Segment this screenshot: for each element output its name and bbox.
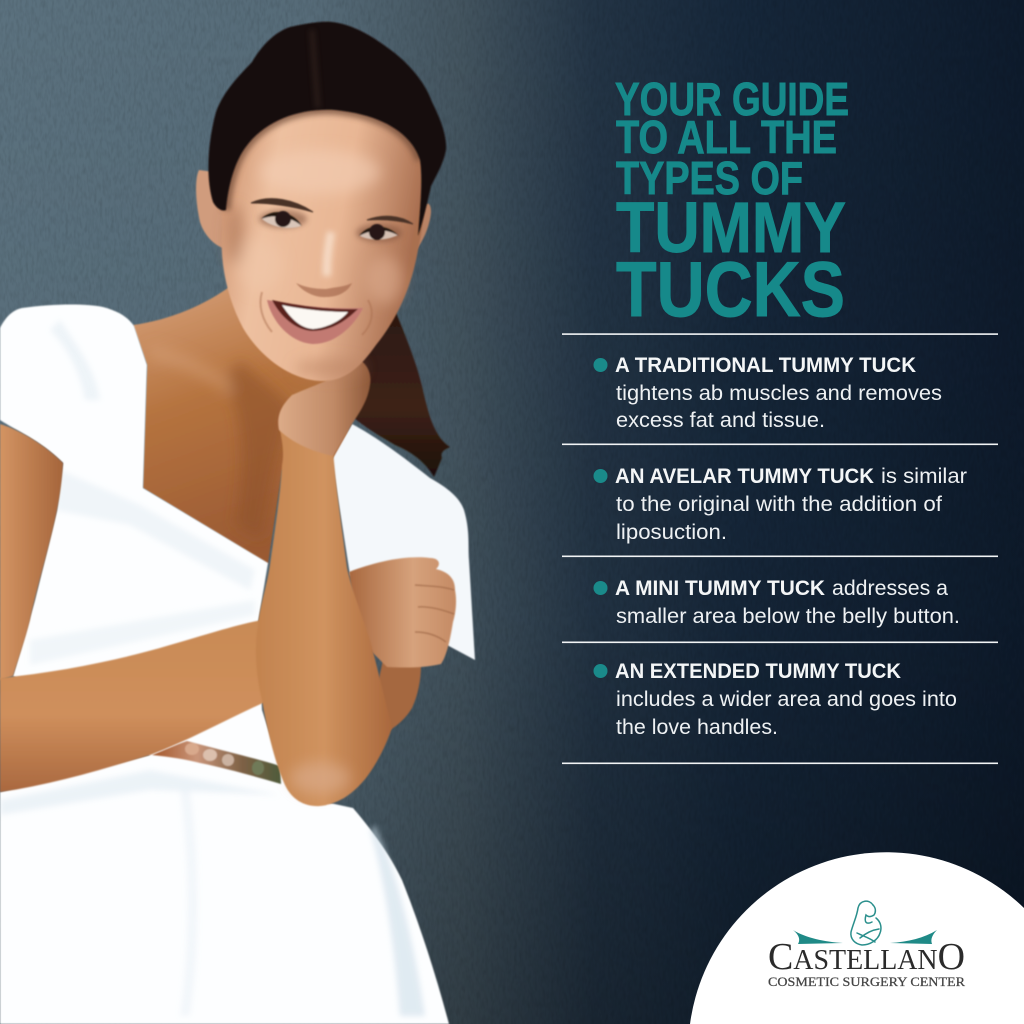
cheek smile lines [260,292,372,335]
mouth [267,300,363,344]
photo: smiling woman in white dress [0,22,475,1024]
title: YOUR GUIDE [615,73,849,125]
elbow highlight [290,762,350,794]
title: TO ALL THE [616,111,837,163]
nose [296,232,352,297]
bent arm with elbow [256,430,392,806]
list item: avelar tummy tuck: liposuction. [616,521,727,544]
list item: avelar tummy tuck: AN AVELAR TUMMY TUCK [615,465,874,488]
logo right wing [890,930,937,944]
list item: mini tummy tuck: smaller area below the belly button. [616,605,960,628]
logo left wing [793,930,843,944]
right eye [359,224,399,240]
left eyebrow [251,199,313,212]
list item: mini tummy tuck: A MINI TUMMY TUCK [615,577,825,600]
lower right forearm behind elbow [370,660,421,730]
dress fold shadows [0,320,425,1016]
left upper arm [0,424,63,680]
knuckle lines [415,585,454,642]
list item: traditional tummy tuck: excess fat and tissue. [616,409,825,432]
list item: mini tummy tuck [594,577,960,628]
neck and chest [133,285,362,564]
eye shadows [259,210,402,242]
title: TUMMY [616,189,846,268]
list item: traditional tummy tuck [594,354,942,432]
hair parting highlight [312,30,318,108]
white circle [690,852,1024,1024]
ponytail [354,305,450,477]
hairline soft brown transition [226,110,420,210]
face [222,102,426,381]
belt [152,741,281,784]
title: TUCKS [616,245,845,333]
logo subtitle: COSMETIC SURGERY CENTER [768,974,965,989]
list item: avelar tummy tuck [594,465,967,544]
icon: logo woman outline [851,901,881,945]
title [615,73,849,333]
right ear [410,204,431,250]
chest shading [150,345,290,540]
logo badge [690,852,1024,1024]
list item: extended tummy tuck: AN EXTENDED TUMMY TUCK [615,660,901,683]
right sleeve of dress [332,424,475,660]
hair [208,22,446,236]
lower forearm across body [0,620,265,792]
list item: avelar tummy tuck: is similar [881,465,967,488]
logo wordmark: CASTELLANO [768,936,965,978]
list item: extended tummy tuck [594,660,957,739]
list item: traditional tummy tuck: A TRADITIONAL TUMMY TUCK [615,354,916,377]
divider lines [562,333,998,764]
left eye [261,211,302,228]
title: TYPES OF [616,152,803,204]
list item: mini tummy tuck: addresses a [832,577,948,600]
hand under chin [278,360,371,456]
list item: traditional tummy tuck: tightens ab muscles and removes [616,382,942,405]
main white dress [0,304,449,1024]
list item: avelar tummy tuck: to the original with the addition of [616,493,942,516]
list item: extended tummy tuck: includes a wider area and goes into [616,688,957,711]
left ear [196,170,232,248]
cheek and forehead lights [226,150,403,377]
right eyebrow [367,216,413,224]
clasped hand [349,557,456,668]
list item: extended tummy tuck: the love handles. [616,716,778,739]
